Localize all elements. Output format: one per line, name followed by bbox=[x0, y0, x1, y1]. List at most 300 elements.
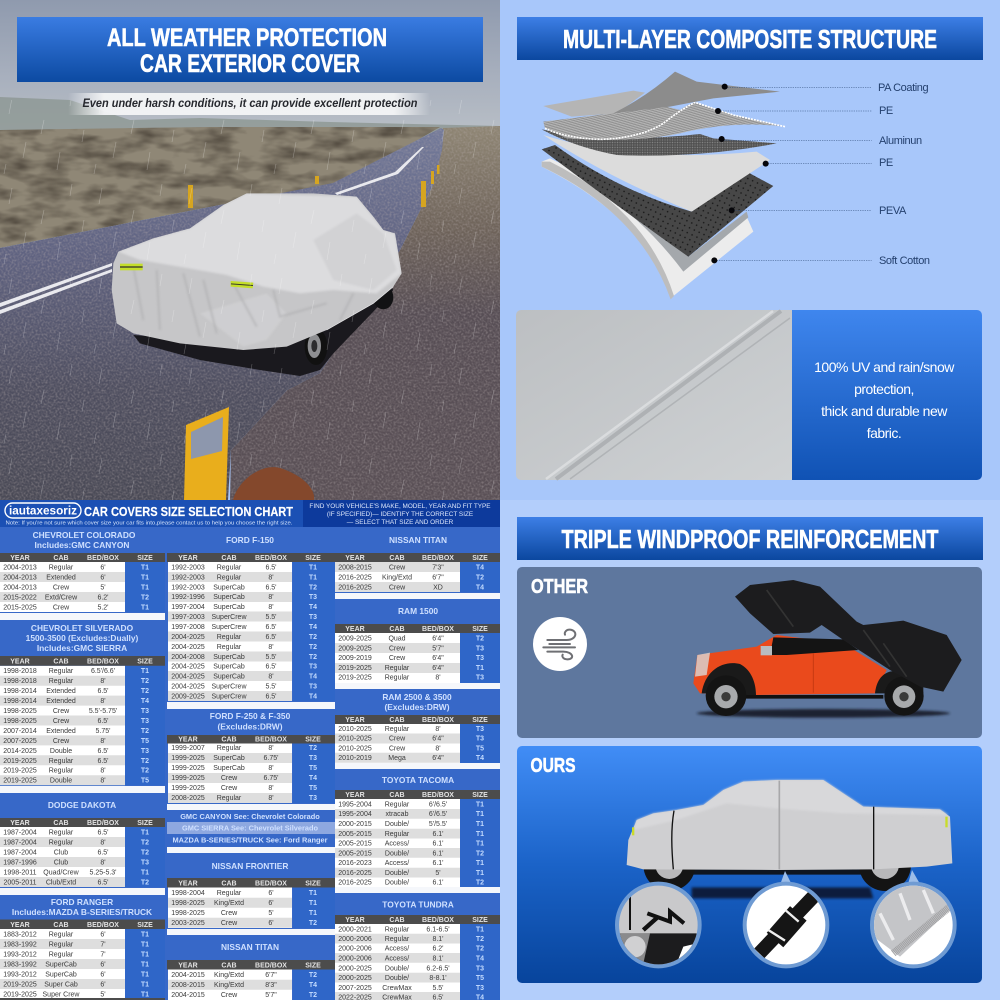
table: chevrolet silverado: 1998-2025 bbox=[3, 718, 37, 725]
table: chevrolet colorado: YEAR bbox=[10, 555, 30, 562]
table: ram 1500: Regular bbox=[385, 675, 410, 682]
table: nissan titan (part one) bbox=[167, 942, 335, 1000]
table: chevrolet silverado: T5 bbox=[141, 738, 149, 745]
table: toyota tacoma: YEAR bbox=[345, 792, 365, 799]
table: ram 1500: 2019-2025 bbox=[338, 665, 372, 672]
table: toyota tundra: CrewMax bbox=[382, 985, 412, 992]
table: ford f-250 and f-350 bbox=[167, 711, 335, 803]
table: ford f-150: 5.5' bbox=[265, 684, 277, 690]
table: dodge dakota: YEAR bbox=[10, 820, 30, 827]
callout: buckle strap bbox=[745, 884, 827, 966]
table: nissan titan (part two) bbox=[335, 535, 500, 592]
table: ram 1500: T1 bbox=[476, 665, 484, 672]
table: toyota tundra: T2 bbox=[476, 946, 484, 953]
table: chevrolet silverado: Crew bbox=[53, 738, 70, 745]
table: chevrolet silverado: 1998-2014 bbox=[3, 698, 37, 705]
table: ford f-150: T4 bbox=[309, 624, 317, 631]
table: ford f-150: 6.5' bbox=[265, 664, 277, 671]
table: chevrolet colorado: 5.2' bbox=[97, 604, 109, 612]
table: nissan frontier: Regular bbox=[217, 890, 242, 897]
table: dodge dakota: CAB bbox=[53, 820, 69, 827]
table: toyota tundra: 8.1' bbox=[432, 936, 444, 943]
table: nissan frontier: 2003-2025 bbox=[171, 920, 205, 927]
table: toyota tundra: 8-8.1' bbox=[429, 975, 447, 982]
table: ram 2500 and 3500: 6'4" bbox=[432, 736, 444, 743]
table: ford ranger: Regular bbox=[49, 932, 74, 938]
table: chevrolet silverado: T5 bbox=[141, 778, 149, 785]
table: ford ranger: T1 bbox=[141, 952, 149, 958]
table: nissan titan (part one): 5'7" bbox=[265, 992, 277, 999]
table: ford f-150: YEAR bbox=[178, 555, 198, 562]
table: ford f-150: 1997-2003 bbox=[171, 614, 205, 621]
table: ford f-150: T2 bbox=[309, 634, 317, 641]
table: chevrolet silverado: Double bbox=[50, 748, 72, 755]
table: ford f-150: T1 bbox=[309, 564, 317, 572]
table: ford f-250 and f-350: (Excludes:DRW) bbox=[218, 722, 283, 732]
reflective strips bbox=[120, 264, 253, 288]
table: chevrolet silverado: 2019-2025 bbox=[3, 758, 37, 765]
table: ford f-250 and f-350: 1999-2007 bbox=[171, 745, 205, 752]
table: nissan titan (part one): T2 bbox=[309, 972, 317, 979]
table: ford ranger: T1 bbox=[141, 942, 149, 948]
table: ram 2500 and 3500: Mega bbox=[388, 755, 406, 762]
table: ford f-150: 1992-2003 bbox=[171, 584, 205, 591]
rain bbox=[0, 100, 500, 500]
table: dodge dakota: DODGE DAKOTA bbox=[48, 800, 116, 810]
table: dodge dakota: T2 bbox=[141, 880, 149, 886]
table: toyota tundra: T4 bbox=[476, 956, 484, 962]
table: toyota tundra: T5 bbox=[476, 975, 484, 982]
table: chevrolet silverado: 1998-2014 bbox=[3, 688, 37, 695]
table: ford ranger: 6' bbox=[100, 972, 106, 978]
table: ford ranger: 7' bbox=[100, 942, 106, 948]
table: toyota tacoma: 6.1' bbox=[432, 850, 444, 857]
table: dodge dakota: 6.5' bbox=[97, 850, 109, 856]
table: ford f-150: 2004-2025 bbox=[171, 674, 205, 681]
table: ford f-150: SuperCrew bbox=[211, 624, 247, 631]
table: ford f-150: 1997-2004 bbox=[171, 604, 205, 611]
table: chevrolet silverado: 2019-2025 bbox=[3, 768, 37, 775]
table: toyota tacoma: T1 bbox=[476, 811, 484, 818]
table: ford ranger: Includes:MAZDA B-SERIES/TRUCK bbox=[12, 907, 152, 917]
table: ram 1500: 2009-2025 bbox=[338, 645, 372, 652]
layer labels bbox=[878, 82, 930, 267]
table: toyota tacoma: T1 bbox=[476, 840, 484, 848]
table: dodge dakota: 5.25-5.3' bbox=[89, 870, 117, 876]
table: dodge dakota: Quad/Crew bbox=[43, 870, 80, 876]
table: ford ranger: Regular bbox=[49, 952, 74, 958]
table: chevrolet silverado: T2 bbox=[141, 728, 149, 735]
table: chevrolet silverado: 8' bbox=[100, 768, 106, 775]
table: dodge dakota: 8' bbox=[100, 860, 106, 866]
table: dodge dakota: 6.5' bbox=[97, 880, 109, 886]
table: ram 2500 and 3500 bbox=[335, 692, 500, 763]
table: chevrolet silverado: Includes:GMC SIERRA bbox=[37, 643, 127, 653]
table: ford f-150 bbox=[167, 535, 335, 701]
table: ford f-150: 5.5' bbox=[265, 654, 277, 661]
table: ford f-150: T1 bbox=[309, 574, 317, 581]
table: ford f-250 and f-350: Regular bbox=[217, 795, 242, 802]
title line 1: ALL WEATHER PROTECTION bbox=[107, 24, 387, 52]
road markings bbox=[0, 147, 424, 314]
table: ford f-150: 6.5' bbox=[265, 634, 277, 641]
table: ford f-250 and f-350: CAB bbox=[221, 736, 237, 744]
table: nissan titan (part two): Crew bbox=[389, 584, 406, 592]
table: nissan frontier: YEAR bbox=[178, 880, 198, 888]
table: toyota tundra: Double/ bbox=[385, 965, 409, 972]
table: chevrolet silverado: T2 bbox=[141, 688, 149, 695]
table: ram 1500: T3 bbox=[476, 675, 484, 682]
table: ram 1500: T2 bbox=[476, 636, 484, 642]
table: ford ranger: 1883-2012 bbox=[3, 932, 37, 938]
table: nissan titan (part two): BED/BOX bbox=[422, 555, 454, 562]
table: ram 2500 and 3500: 2010-2025 bbox=[338, 745, 372, 752]
table: ford f-250 and f-350: 6.75' bbox=[264, 775, 278, 782]
table: chevrolet silverado: T2 bbox=[141, 678, 149, 685]
table: chevrolet silverado: Extended bbox=[46, 728, 76, 735]
light blue background bbox=[500, 0, 1000, 500]
table: ram 1500: Regular bbox=[385, 665, 410, 672]
table: ram 1500: Quad bbox=[388, 636, 406, 642]
white gaps bbox=[0, 593, 500, 935]
table: toyota tundra: YEAR bbox=[345, 917, 365, 924]
callout: tie-down strap bbox=[617, 884, 700, 970]
table: chevrolet silverado: Extended bbox=[46, 698, 76, 705]
table: chevrolet colorado: Crew bbox=[53, 604, 70, 612]
subtitle text: Even under harsh conditions, it can provide excellent protection bbox=[82, 98, 418, 110]
table: chevrolet silverado: 6.5'/6.6' bbox=[91, 668, 115, 675]
table: ford f-150: T3 bbox=[309, 684, 317, 690]
table: ford ranger: T1 bbox=[141, 982, 149, 988]
table: ram 2500 and 3500: T3 bbox=[476, 736, 484, 743]
table: nissan titan (part two): 2016-2025 bbox=[338, 584, 372, 592]
table: ford f-150: 1992-2003 bbox=[171, 574, 205, 581]
table: ford f-250 and f-350: 1999-2025 bbox=[171, 765, 205, 772]
table: ford ranger: FORD RANGER bbox=[51, 897, 113, 907]
table: nissan titan (part one): 2008-2015 bbox=[171, 982, 205, 989]
table: chevrolet colorado: CAB bbox=[53, 555, 69, 562]
table: toyota tundra: T3 bbox=[476, 965, 484, 972]
label: PEVA: PEVA bbox=[879, 205, 907, 217]
table: chevrolet colorado: Regular bbox=[49, 564, 74, 572]
soft cotton layer bbox=[542, 158, 753, 299]
table: nissan frontier: 5' bbox=[268, 910, 274, 917]
table: nissan titan (part one): 6'7" bbox=[265, 972, 277, 979]
table: ford f-250 and f-350: T3 bbox=[309, 795, 317, 802]
table: nissan frontier: 1998-2025 bbox=[171, 900, 205, 907]
table: nissan titan (part two): 2008-2015 bbox=[338, 564, 372, 572]
PEVA layer bbox=[542, 145, 773, 257]
table: chevrolet silverado: Crew bbox=[53, 708, 70, 715]
table: ford f-150: T4 bbox=[309, 604, 317, 611]
table: ram 1500: BED/BOX bbox=[422, 626, 454, 633]
table: chevrolet colorado: T1 bbox=[141, 604, 149, 612]
subtitle strip bbox=[68, 93, 430, 115]
table: toyota tacoma: 2016-2025 bbox=[338, 880, 372, 886]
table: chevrolet silverado: 2007-2014 bbox=[3, 728, 37, 735]
car cover bbox=[112, 193, 402, 350]
table: ford ranger: T1 bbox=[141, 972, 149, 978]
table: ford f-150: SuperCab bbox=[213, 654, 245, 661]
table: ford f-150: CAB bbox=[221, 555, 237, 562]
table: ford ranger: 5' bbox=[100, 992, 106, 998]
table: chevrolet silverado: 6.5' bbox=[97, 748, 109, 755]
foreground shrub bbox=[233, 467, 314, 500]
table: chevrolet colorado: 2004-2013 bbox=[3, 564, 37, 572]
table: ford f-150: 5.5' bbox=[265, 614, 277, 621]
table: chevrolet silverado: T1 bbox=[141, 668, 149, 675]
table: ford ranger: T1 bbox=[141, 962, 149, 968]
table: nissan frontier: BED/BOX bbox=[255, 880, 287, 888]
table: toyota tacoma: 2000-2015 bbox=[338, 821, 372, 828]
table: ford ranger: Super Crew bbox=[43, 992, 80, 998]
panel: all weather photo bbox=[0, 0, 500, 500]
table: toyota tacoma: T2 bbox=[476, 880, 484, 886]
brand pill: iautaxesoriz bbox=[9, 506, 77, 518]
table: toyota tacoma: 2005-2015 bbox=[338, 850, 372, 857]
table: dodge dakota: 1987-1996 bbox=[3, 860, 37, 866]
sky bbox=[0, 0, 500, 135]
table: toyota tundra: 2000-2006 bbox=[338, 956, 372, 962]
table: dodge dakota bbox=[0, 800, 165, 887]
table: ford f-150: BED/BOX bbox=[255, 555, 287, 562]
table: chevrolet silverado: 8' bbox=[100, 738, 106, 745]
table: toyota tacoma: T1 bbox=[476, 821, 484, 828]
table: ram 2500 and 3500: 2010-2025 bbox=[338, 726, 372, 733]
panel: triple windproof reinforcement bbox=[500, 500, 1000, 1000]
table: nissan frontier: CAB bbox=[221, 880, 237, 888]
table: ford f-150: 6.5' bbox=[265, 694, 277, 700]
table: nissan titan (part one): T4 bbox=[309, 982, 317, 989]
table: ram 1500: 5'7" bbox=[432, 645, 444, 652]
table: chevrolet silverado: 2014-2025 bbox=[3, 748, 37, 755]
table: chevrolet silverado: 5.5'-5.75' bbox=[89, 708, 117, 715]
table: toyota tundra: 2000-2025 bbox=[338, 975, 372, 982]
table: toyota tacoma: 2016-2025 bbox=[338, 870, 372, 877]
table: ford f-150: Regular bbox=[217, 644, 242, 651]
table: nissan titan (part one): Crew bbox=[221, 992, 238, 999]
table: nissan frontier: SIZE bbox=[305, 880, 321, 888]
table: chevrolet colorado: 2015-2025 bbox=[3, 604, 37, 612]
table: toyota tacoma: T1 bbox=[476, 831, 484, 838]
table: ford f-250 and f-350: SuperCab bbox=[213, 755, 245, 762]
distant hills bbox=[0, 97, 500, 140]
table: ford f-150: T2 bbox=[309, 584, 317, 591]
table: nissan frontier bbox=[167, 861, 335, 928]
table: ram 1500: 6'4" bbox=[432, 665, 444, 672]
table: ram 1500: 2009-2025 bbox=[338, 636, 372, 642]
table: ram 1500: T3 bbox=[476, 645, 484, 652]
label: PA coating: PA Coating bbox=[878, 82, 929, 94]
table: ford f-250 and f-350: Crew bbox=[221, 785, 238, 792]
table: ford f-150: 6.5' bbox=[265, 624, 277, 631]
table: chevrolet silverado: 2007-2025 bbox=[3, 738, 37, 745]
table: nissan titan (part one): NISSAN TITAN bbox=[221, 942, 279, 952]
chart background bbox=[0, 500, 500, 1000]
table: ford f-150: Regular bbox=[217, 634, 242, 641]
table: toyota tacoma: 1995-2004 bbox=[338, 802, 372, 808]
chart instructions: FIND YOUR VEHICLE'S MAKE, MODEL, YEAR AND FIT TYPE bbox=[309, 503, 491, 510]
table: ford f-150: Regular bbox=[217, 564, 242, 572]
table: nissan titan (part two): Crew bbox=[389, 564, 406, 572]
table: ram 2500 and 3500: 6'4" bbox=[432, 755, 444, 762]
table: ford f-250 and f-350: SuperCab bbox=[213, 765, 245, 772]
table: ram 2500 and 3500: BED/BOX bbox=[422, 717, 454, 724]
table: chevrolet silverado: SIZE bbox=[137, 658, 153, 666]
table: toyota tacoma: Regular bbox=[385, 802, 410, 808]
table: nissan titan (part one): T2 bbox=[309, 992, 317, 999]
table: chevrolet silverado: T3 bbox=[141, 718, 149, 725]
table: ford f-150: SuperCrew bbox=[211, 614, 247, 621]
table: ford ranger: T1 bbox=[141, 932, 149, 938]
panel text: protection, bbox=[854, 381, 914, 397]
panel text: thick and durable new bbox=[821, 403, 948, 419]
table: nissan titan (part two): YEAR bbox=[345, 555, 365, 562]
table: chevrolet colorado: BED/BOX bbox=[87, 555, 119, 562]
table: nissan frontier: T1 bbox=[309, 890, 317, 897]
table: chevrolet silverado: Regular bbox=[49, 678, 74, 685]
table: toyota tundra: Access/ bbox=[385, 956, 409, 962]
table: nissan frontier: T2 bbox=[309, 920, 317, 927]
table: dodge dakota: 1987-2004 bbox=[3, 840, 37, 846]
table: chevrolet colorado: 2004-2013 bbox=[3, 574, 37, 582]
table: ford ranger: YEAR bbox=[10, 922, 30, 929]
table: chevrolet colorado: T1 bbox=[141, 574, 149, 582]
table: nissan frontier: 6' bbox=[268, 920, 274, 927]
table: chevrolet silverado: Crew bbox=[53, 718, 70, 725]
table: dodge dakota: T1 bbox=[141, 830, 149, 836]
truck with blown-off cover bbox=[693, 580, 962, 718]
table: chevrolet silverado: 2019-2025 bbox=[3, 778, 37, 785]
table: ram 2500 and 3500: Crew bbox=[389, 736, 406, 743]
table: ford f-150: SIZE bbox=[305, 555, 321, 562]
table: ford ranger: 6' bbox=[100, 982, 106, 988]
table: dodge dakota: Regular bbox=[49, 830, 74, 836]
table: toyota tundra: 8.1' bbox=[432, 956, 444, 962]
table: ford ranger: Regular bbox=[49, 942, 74, 948]
table: chevrolet silverado: 1998-2025 bbox=[3, 708, 37, 715]
table: chevrolet colorado: T1 bbox=[141, 564, 149, 572]
table: nissan titan (part one): YEAR bbox=[178, 962, 198, 970]
title line 2: CAR EXTERIOR COVER bbox=[140, 50, 360, 78]
table: toyota tacoma: 6.1' bbox=[432, 880, 444, 886]
table: toyota tacoma: 5' bbox=[435, 870, 441, 877]
table: dodge dakota: Club bbox=[54, 850, 68, 856]
brand pill bbox=[5, 503, 81, 518]
table: ford f-250 and f-350: 1999-2025 bbox=[171, 755, 205, 762]
table: nissan titan (part two): SIZE bbox=[472, 555, 488, 562]
table: dodge dakota: 1987-2004 bbox=[3, 830, 37, 836]
table: toyota tacoma: BED/BOX bbox=[422, 792, 454, 799]
table: nissan frontier: NISSAN FRONTIER bbox=[212, 861, 288, 871]
table: ford ranger: CAB bbox=[53, 922, 69, 929]
table: toyota tacoma: T1 bbox=[476, 870, 484, 877]
table: ram 2500 and 3500: YEAR bbox=[345, 717, 365, 724]
blue text panel bbox=[792, 310, 982, 480]
heading banner bbox=[517, 17, 983, 60]
table: toyota tacoma: SIZE bbox=[472, 792, 488, 799]
table: ford f-150: T2 bbox=[309, 654, 317, 661]
table: ford ranger bbox=[0, 897, 165, 1000]
table: ford f-250 and f-350: SIZE bbox=[305, 736, 321, 744]
chart instructions: — SELECT THAT SIZE AND ORDER bbox=[347, 519, 454, 526]
table: chevrolet silverado: BED/BOX bbox=[87, 658, 119, 666]
table: toyota tundra: T2 bbox=[476, 936, 484, 943]
table: nissan frontier: T1 bbox=[309, 900, 317, 907]
wheels bbox=[305, 285, 393, 365]
cross-reference notes bbox=[167, 812, 335, 844]
table: ram 1500: T3 bbox=[476, 655, 484, 662]
table: dodge dakota: T2 bbox=[141, 850, 149, 856]
table: nissan frontier: 1998-2004 bbox=[171, 890, 205, 897]
heading banner bbox=[517, 517, 983, 560]
table: toyota tundra: 6.2' bbox=[432, 946, 444, 953]
fabric close-up bbox=[516, 310, 796, 480]
table: chevrolet silverado: CHEVROLET SILVERADO bbox=[31, 623, 134, 633]
table: chevrolet colorado: 6.2' bbox=[97, 594, 109, 602]
table: chevrolet silverado: 8' bbox=[100, 778, 106, 785]
table: dodge dakota: 1987-2004 bbox=[3, 850, 37, 856]
table: dodge dakota: T3 bbox=[141, 860, 149, 866]
title banner bbox=[17, 17, 483, 82]
table: nissan titan (part one): 8'3" bbox=[265, 982, 277, 989]
table: nissan frontier: 6' bbox=[268, 900, 274, 907]
table: toyota tacoma: Double/ bbox=[385, 880, 409, 886]
table: ford f-250 and f-350: 8' bbox=[268, 785, 274, 792]
table: ram 1500: 2019-2025 bbox=[338, 675, 372, 682]
table: ram 2500 and 3500: (Excludes:DRW) bbox=[384, 702, 450, 712]
label: ours: OURS bbox=[530, 755, 576, 777]
table: toyota tacoma: 2005-2015 bbox=[338, 840, 372, 848]
moss field bbox=[0, 127, 440, 248]
table: toyota tacoma: Double/ bbox=[385, 850, 409, 857]
table: ford f-250 and f-350: 8' bbox=[268, 795, 274, 802]
chart title: CAR COVERS SIZE SELECTION CHART bbox=[84, 504, 293, 519]
table: toyota tundra: SIZE bbox=[472, 917, 488, 924]
table: ford f-150: Regular bbox=[217, 574, 242, 581]
table: toyota tacoma: T1 bbox=[476, 802, 484, 808]
table: chevrolet silverado: T4 bbox=[141, 698, 149, 705]
table: chevrolet colorado: Includes:GMC CANYON bbox=[35, 540, 129, 550]
shadow under car bbox=[133, 280, 393, 376]
table: ford f-150: SuperCab bbox=[213, 604, 245, 611]
table: ford f-150: SuperCrew bbox=[211, 684, 247, 690]
table: nissan frontier: 6' bbox=[268, 890, 274, 897]
table: ford f-250 and f-350: 8' bbox=[268, 745, 274, 752]
table: dodge dakota: BED/BOX bbox=[87, 820, 119, 827]
table: chevrolet silverado: 5.75' bbox=[96, 728, 110, 735]
table: nissan titan (part two): T4 bbox=[476, 564, 484, 572]
comparison panel: ours bbox=[517, 746, 982, 983]
table: nissan titan (part two): CAB bbox=[389, 555, 405, 562]
table: nissan titan (part two): 2016-2025 bbox=[338, 574, 372, 582]
table: ford f-150: 2004-2025 bbox=[171, 634, 205, 641]
table: ram 1500: RAM 1500 bbox=[398, 606, 438, 616]
table: chevrolet silverado: Regular bbox=[49, 668, 74, 675]
table: dodge dakota: Regular bbox=[49, 840, 74, 846]
panel: size selection chart bbox=[0, 500, 500, 1000]
table: chevrolet silverado: 1500-3500 (Excludes:Dually) bbox=[26, 633, 139, 643]
table: toyota tundra: Regular bbox=[385, 926, 410, 934]
table: toyota tacoma: Access/ bbox=[385, 840, 409, 848]
label: soft cotton: Soft Cotton bbox=[879, 255, 930, 267]
callout pointers bbox=[780, 870, 920, 885]
table: ford ranger: 1993-2012 bbox=[3, 972, 37, 978]
table: chevrolet silverado: Double bbox=[50, 778, 72, 785]
table: toyota tacoma: Double/ bbox=[385, 821, 409, 828]
table: dodge dakota: 2005-2011 bbox=[4, 880, 37, 886]
table: dodge dakota: SIZE bbox=[137, 820, 153, 827]
